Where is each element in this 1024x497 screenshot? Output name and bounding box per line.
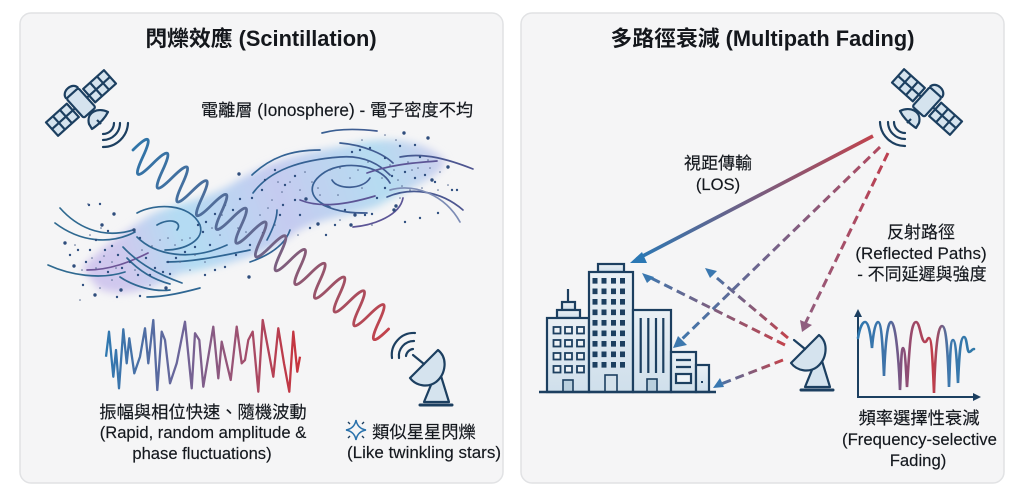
label: LOS: (LOS) xyxy=(696,175,740,194)
caption: like twinkling stars: (Like twinkling stars) xyxy=(347,443,501,462)
wavy signal xyxy=(123,136,398,343)
dashed path: antenna reflection to tower xyxy=(642,273,785,345)
caption: amplitude and phase: (Rapid, random amplitude & xyxy=(100,423,306,442)
panel: multipath fading xyxy=(521,13,1004,483)
icon: ground antenna right xyxy=(791,335,833,390)
label: LOS xyxy=(684,154,752,194)
caption: frequency-selective fading: Fading) xyxy=(890,451,946,470)
dashed path: satellite to antenna xyxy=(800,153,888,332)
building 3 xyxy=(633,310,671,392)
icon: satellite right xyxy=(880,61,969,146)
label: reflected paths: 反射路徑 xyxy=(887,223,955,242)
electron dots xyxy=(65,133,457,300)
buildings xyxy=(539,264,716,392)
caption: frequency-selective fading: 頻率選擇性衰減 xyxy=(859,408,979,428)
arrow: line of sight xyxy=(630,136,873,263)
label: ionosphere: 電離層 (Ionosphere) - 電子密度不均 xyxy=(201,100,473,120)
building 2 xyxy=(589,264,633,392)
building 1 xyxy=(547,289,589,392)
label: reflected paths: - 不同延遲與強度 xyxy=(857,265,987,284)
building 4 xyxy=(671,352,696,392)
label: LOS: 視距傳輸 xyxy=(684,154,752,173)
caption: like twinkling stars: 類似星星閃爍 xyxy=(372,422,476,442)
building 5 xyxy=(696,365,709,392)
dashed path: satellite to building xyxy=(673,147,880,348)
chart: frequency-selective fading xyxy=(854,309,981,401)
caption: frequency-selective fading: (Frequency-selective xyxy=(842,430,997,449)
title: multipath: 多路徑衰減 (Multipath Fading) xyxy=(611,26,914,51)
caption: amplitude and phase: 振幅與相位快速、隨機波動 xyxy=(99,402,307,422)
panel: scintillation xyxy=(20,13,503,483)
label: reflected paths: (Reflected Paths) xyxy=(855,244,987,263)
title: scintillation: 閃爍效應 (Scintillation) xyxy=(145,26,377,51)
caption: amplitude and phase xyxy=(99,402,307,463)
label: reflected paths xyxy=(855,223,987,284)
ionosphere cloud xyxy=(48,129,473,300)
panel background left xyxy=(20,13,503,483)
icon: ground antenna left xyxy=(392,333,452,405)
panel background right xyxy=(521,13,1004,483)
dashed path: antenna reflection to base xyxy=(713,360,783,388)
caption: like twinkling stars xyxy=(347,422,501,462)
dashed path: antenna reflection up xyxy=(705,268,788,338)
swirl lines xyxy=(48,129,473,297)
axes xyxy=(854,309,981,401)
caption: amplitude and phase: phase fluctuations) xyxy=(132,444,272,463)
icon: satellite left xyxy=(39,62,128,147)
fading curve xyxy=(858,322,974,393)
caption: frequency-selective fading xyxy=(842,408,997,470)
icon: twinkle star xyxy=(346,420,366,440)
noise waveform xyxy=(106,320,300,392)
